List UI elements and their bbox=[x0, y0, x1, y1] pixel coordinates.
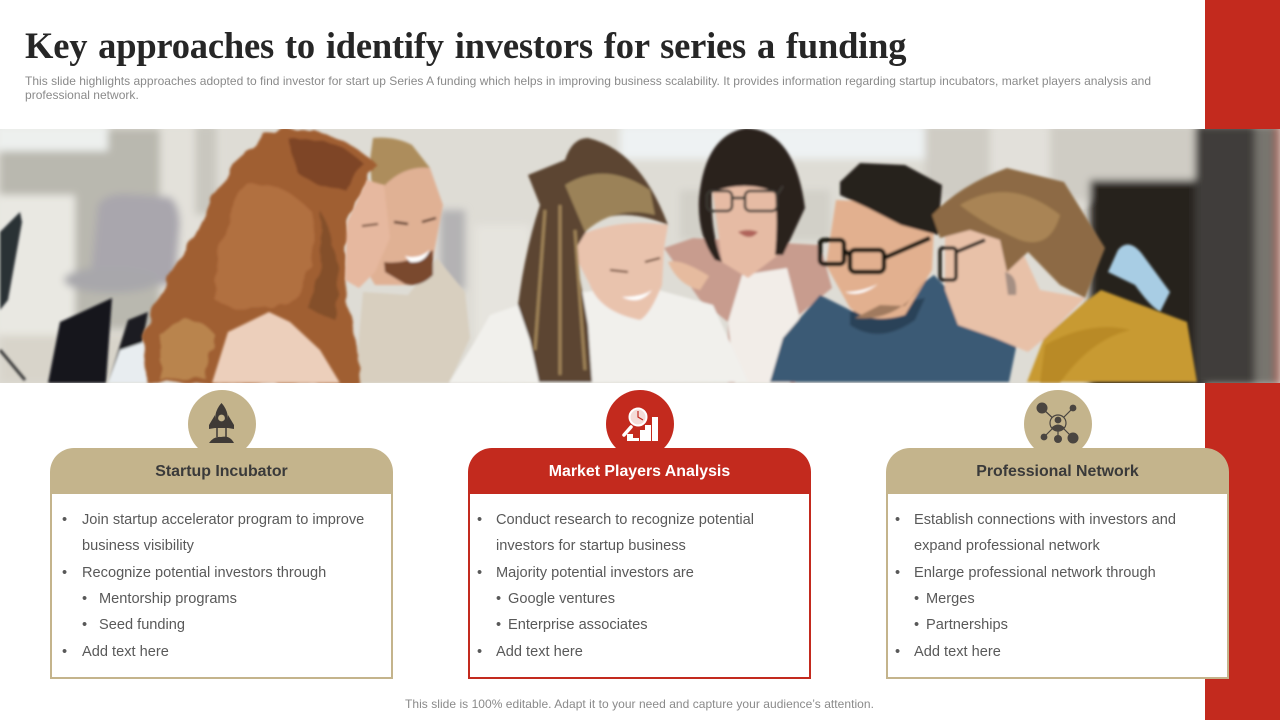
card text: Startup Incubator: Mentorship programs bbox=[99, 591, 237, 607]
card text: Professional Network: • bbox=[914, 591, 919, 607]
card text: Market Players Analysis: Conduct research to recognize potential bbox=[496, 512, 754, 528]
footer note: This slide is 100% editable. Adapt it to your need and capture your audience’s attention. bbox=[405, 697, 874, 711]
icon circle: network bbox=[1024, 390, 1092, 458]
card text: Professional Network: Establish connections with investors and bbox=[914, 512, 1176, 528]
card text: Market Players Analysis: • bbox=[477, 644, 482, 660]
card text: Professional Network: Add text here bbox=[914, 644, 1001, 660]
subtitle: This slide highlights approaches adopted to find investor for start up Series A funding which helps in improving business scalability. It provides information regarding startup incubators, market players analysis and bbox=[25, 74, 1151, 88]
person: man with glasses bbox=[770, 275, 1018, 382]
person: woman with curly hair bbox=[143, 130, 390, 383]
card text: Market Players Analysis: Add text here bbox=[496, 644, 583, 660]
subtitle: professional network. bbox=[25, 88, 139, 102]
card text: Professional Network: Merges bbox=[926, 591, 975, 607]
background furniture bbox=[0, 212, 22, 310]
card text: Startup Incubator: Add text here bbox=[82, 644, 169, 660]
card text: Startup Incubator: Join startup accelerator program to improve bbox=[82, 512, 364, 528]
card text: Market Players Analysis: Google ventures bbox=[508, 591, 615, 607]
icon: magnifier and bars bbox=[622, 408, 658, 441]
card body bbox=[468, 494, 811, 679]
card text: Startup Incubator bbox=[62, 512, 364, 660]
card heading bbox=[886, 448, 1229, 494]
card text: Professional Network: • bbox=[895, 644, 900, 660]
card text: Market Players Analysis: investors for startup business bbox=[496, 538, 686, 554]
card text: Professional Network: • bbox=[895, 565, 900, 581]
card text: Market Players Analysis: • bbox=[496, 591, 501, 607]
card text: Market Players Analysis: Majority potential investors are bbox=[496, 565, 694, 581]
card heading: Market Players Analysis bbox=[549, 463, 730, 480]
card text: Market Players Analysis bbox=[477, 512, 754, 660]
person: woman in pink shirt bbox=[664, 238, 832, 383]
card text: Professional Network: • bbox=[914, 617, 919, 633]
subtitle bbox=[25, 74, 1151, 102]
card text: Startup Incubator: • bbox=[62, 644, 67, 660]
card text: Market Players Analysis: Enterprise associates bbox=[508, 617, 648, 633]
card heading: Professional Network bbox=[976, 463, 1139, 480]
card text: Market Players Analysis: • bbox=[477, 512, 482, 528]
card text: Startup Incubator: • bbox=[82, 591, 87, 607]
card text: Market Players Analysis: • bbox=[496, 617, 501, 633]
card: Market Players Analysis bbox=[468, 448, 811, 679]
card text: Professional Network: Partnerships bbox=[926, 617, 1008, 633]
card body bbox=[886, 494, 1229, 679]
card text: Professional Network: • bbox=[895, 512, 900, 528]
card body bbox=[50, 494, 393, 679]
icon circle: rocket bbox=[188, 390, 256, 458]
card text: Professional Network: expand professional network bbox=[914, 538, 1100, 554]
icon: network of people bbox=[1036, 402, 1078, 444]
title: Key approaches to identify investors for series a funding bbox=[25, 25, 906, 66]
icon circle: market analysis bbox=[606, 390, 674, 458]
card heading bbox=[468, 448, 811, 494]
person: woman with dreadlocks bbox=[449, 285, 748, 383]
card: Startup Incubator bbox=[50, 448, 393, 679]
card text: Startup Incubator: • bbox=[82, 617, 87, 633]
card text: Startup Incubator: business visibility bbox=[82, 538, 194, 554]
card text: Professional Network: Enlarge professional network through bbox=[914, 565, 1156, 581]
card heading bbox=[50, 448, 393, 494]
red side bar bbox=[1205, 0, 1280, 720]
card: Professional Network bbox=[886, 448, 1229, 679]
card text: Startup Incubator: Recognize potential investors through bbox=[82, 565, 326, 581]
card text: Startup Incubator: Seed funding bbox=[99, 617, 185, 633]
person: person in mustard hoodie bbox=[1027, 290, 1197, 382]
card text: Startup Incubator: • bbox=[62, 512, 67, 528]
person: man with beard bbox=[355, 258, 470, 383]
card text: Market Players Analysis: • bbox=[477, 565, 482, 581]
card text: Startup Incubator: • bbox=[62, 565, 67, 581]
card heading: Startup Incubator bbox=[155, 463, 288, 480]
team photo illustration bbox=[0, 129, 1280, 383]
card text: Professional Network bbox=[895, 512, 1176, 660]
icon: rocket bbox=[209, 403, 234, 443]
